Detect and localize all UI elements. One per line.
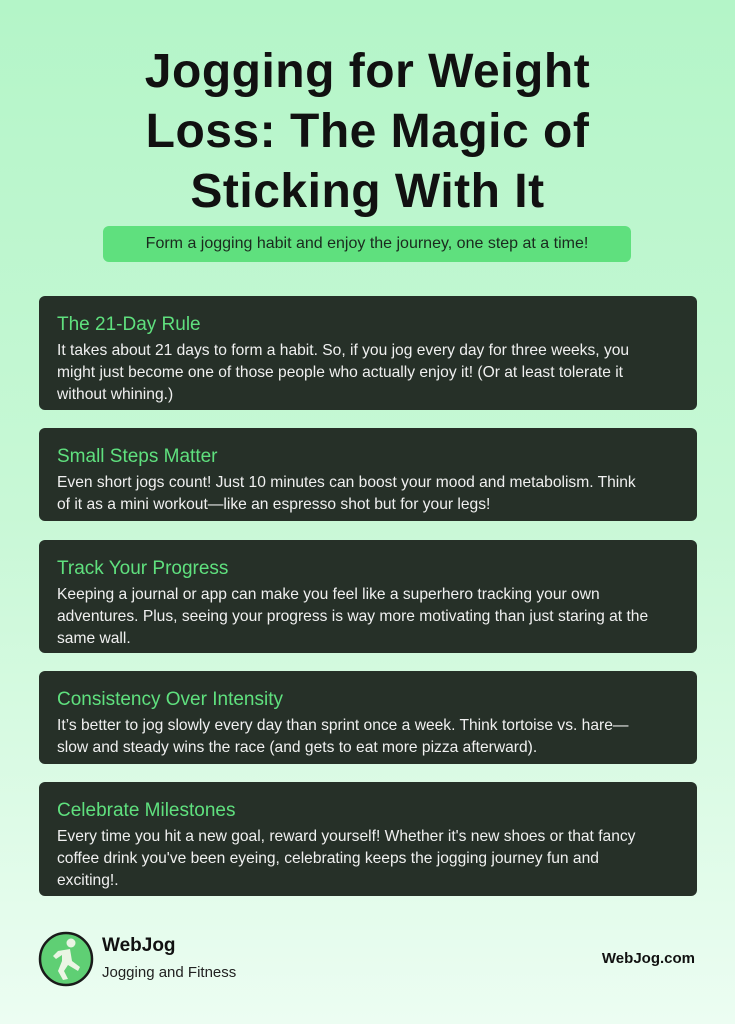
website: WebJog.com <box>602 950 695 967</box>
title: Loss: The Magic of <box>146 105 589 158</box>
subtitle pill <box>103 226 631 262</box>
panel: consistency <box>39 671 697 764</box>
panel: milestones: Celebrate Milestones <box>57 800 235 821</box>
icon: logo runner <box>38 932 94 986</box>
panel: small steps: Small Steps Matter <box>57 446 218 467</box>
panel: milestones: Every time you hit a new goal, reward yourself! Whether it's new shoes or that fancy <box>57 828 635 845</box>
panel: 21-day rule: might just become one of those people who actually enjoy it! (Or at least tolerate it <box>57 364 623 381</box>
panel: milestones: coffee drink you've been eyeing, celebrating keeps the jogging journey fun and <box>57 850 599 867</box>
panel: 21-day rule: without whining.) <box>57 386 173 403</box>
panel: track progress: same wall. <box>57 630 131 647</box>
panel: consistency: slow and steady wins the race (and gets to eat more pizza afterward). <box>57 739 537 756</box>
panel: track progress: Keeping a journal or app can make you feel like a superhero tracking your own <box>57 586 600 603</box>
panel: 21-day rule <box>39 296 697 410</box>
panel: track progress <box>39 540 697 653</box>
panel: milestones: exciting!. <box>57 872 119 889</box>
panel: small steps <box>39 428 697 521</box>
subtitle pill: Form a jogging habit and enjoy the journey, one step at a time! <box>146 235 588 252</box>
panel: consistency: It’s better to jog slowly every day than sprint once a week. Think tortoise vs. hare— <box>57 717 628 734</box>
title: Sticking With It <box>190 165 545 218</box>
panel: 21-day rule: It takes about 21 days to form a habit. So, if you jog every day for three weeks, you <box>57 342 629 359</box>
title <box>145 45 590 218</box>
panel: 21-day rule: The 21-Day Rule <box>57 314 201 335</box>
panel: consistency: Consistency Over Intensity <box>57 689 283 710</box>
panel: track progress: adventures. Plus, seeing your progress is way more motivating than just staring at the <box>57 608 648 625</box>
panel: milestones <box>39 782 697 896</box>
panel: small steps: of it as a mini workout—like an espresso shot but for your legs! <box>57 496 490 513</box>
panel: small steps: Even short jogs count! Just 10 minutes can boost your mood and metabolism. Think <box>57 474 636 491</box>
brand tagline: Jogging and Fitness <box>102 964 236 981</box>
panel: track progress: Track Your Progress <box>57 558 228 579</box>
title: Jogging for Weight <box>145 45 590 98</box>
brand name: WebJog <box>102 935 176 956</box>
